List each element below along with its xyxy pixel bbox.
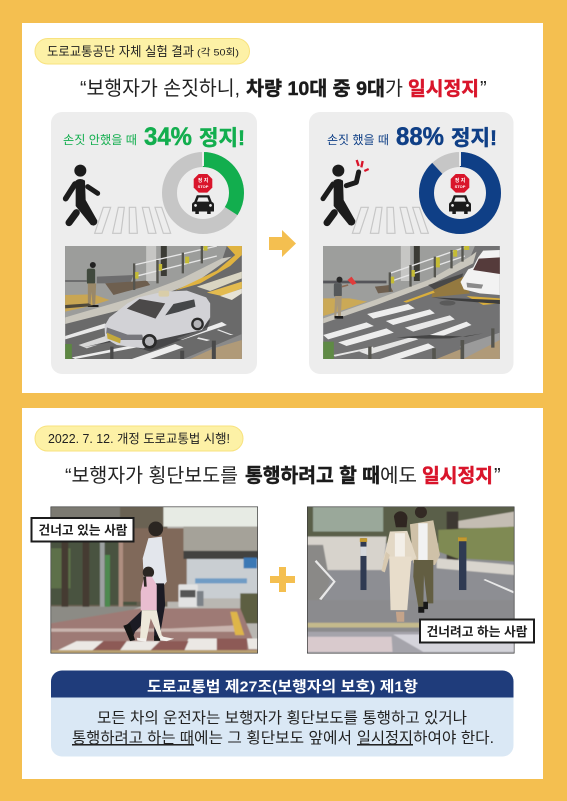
badge: experiment source: (각 50회) <box>197 46 239 58</box>
card heading: 88 percent stopped: 손짓 했을 때 <box>327 133 389 147</box>
photo: people about to cross <box>307 506 514 654</box>
badge: experiment source <box>35 38 250 64</box>
icon: car <box>192 195 214 214</box>
badge: revision date <box>35 426 243 451</box>
icon: stop sign: 정 지 <box>455 177 466 184</box>
law text <box>72 709 494 747</box>
photo: people crossing <box>50 506 258 654</box>
label: person about to cross: 건너려고 하는 사람 <box>426 625 528 639</box>
card heading: 34 percent stopped <box>63 123 245 151</box>
badge: experiment source: 도로교통공단 자체 실험 결과 <box>47 44 194 59</box>
arrow: before to after <box>269 230 296 257</box>
icon: crosswalk <box>95 207 171 233</box>
donut chart: 88 percent <box>426 151 494 226</box>
heading: drivers stopped <box>80 77 487 100</box>
photo: car stopped at crosswalk <box>323 246 500 359</box>
badge: revision date: 2022. 7. 12. 개정 도로교통법 시행! <box>48 431 230 446</box>
heading: stop when about to cross: 일시정지 <box>422 465 493 487</box>
icon: stop sign: 정 지 <box>198 177 209 184</box>
law text: 에는 그 횡단보도 앞에서 <box>194 729 352 747</box>
icon: crosswalk <box>352 207 428 233</box>
card: without hand signal <box>51 112 257 374</box>
heading: drivers stopped: ” <box>480 78 487 100</box>
heading: stop when about to cross: “보행자가 횡단보도를 <box>65 465 238 487</box>
icon: plus <box>270 567 295 592</box>
icon: stop sign: STOP <box>198 184 209 189</box>
label: person about to cross <box>420 620 534 642</box>
heading: stop when about to cross <box>65 465 501 487</box>
law text: 모든 차의 운전자는 보행자가 횡단보도를 통행하고 있거나 <box>97 709 467 727</box>
card heading: 88 percent stopped: 정지! <box>451 127 497 150</box>
label: person crossing <box>32 518 134 542</box>
law text: 통행하려고 하는 때 <box>72 729 194 747</box>
panel: revised traffic law <box>22 408 543 779</box>
heading: stop when about to cross: 통행하려고 할 때 <box>245 465 380 487</box>
heading: stop when about to cross: 에도 <box>380 465 417 487</box>
heading: drivers stopped: 일시정지 <box>408 78 479 100</box>
card heading: 88 percent stopped: 88% <box>396 123 444 151</box>
law text: 일시정지 <box>357 729 413 747</box>
icon: stop sign <box>451 174 469 193</box>
law text: 하여야 한다. <box>413 729 494 747</box>
card heading: 88 percent stopped <box>327 123 497 151</box>
heading: drivers stopped: “보행자가 손짓하니, <box>80 77 240 100</box>
card: with hand signal <box>309 112 514 374</box>
label: person crossing: 건너고 있는 사람 <box>38 524 128 538</box>
law box: road traffic act article 27 <box>51 670 514 756</box>
donut chart: 34 percent <box>170 151 236 226</box>
heading: drivers stopped: 차량 10대 중 9대 <box>246 78 385 100</box>
photo: taxi approaching without stopping <box>65 246 242 359</box>
card heading: 34 percent stopped: 정지! <box>199 127 245 150</box>
panel: experiment results <box>22 23 543 393</box>
law title: 도로교통법 제27조(보행자의 보호) 제1항 <box>147 678 418 696</box>
icon: stop sign: STOP <box>455 184 466 189</box>
icon: car <box>449 195 471 214</box>
icon: walking pedestrian <box>66 165 98 226</box>
card heading: 34 percent stopped: 손짓 안했을 때 <box>63 133 137 147</box>
icon: pedestrian raising hand <box>323 160 369 226</box>
heading: stop when about to cross: ” <box>494 465 501 487</box>
heading: drivers stopped: 가 <box>385 78 403 100</box>
card heading: 34 percent stopped: 34% <box>144 123 192 151</box>
icon: stop sign <box>194 174 212 193</box>
